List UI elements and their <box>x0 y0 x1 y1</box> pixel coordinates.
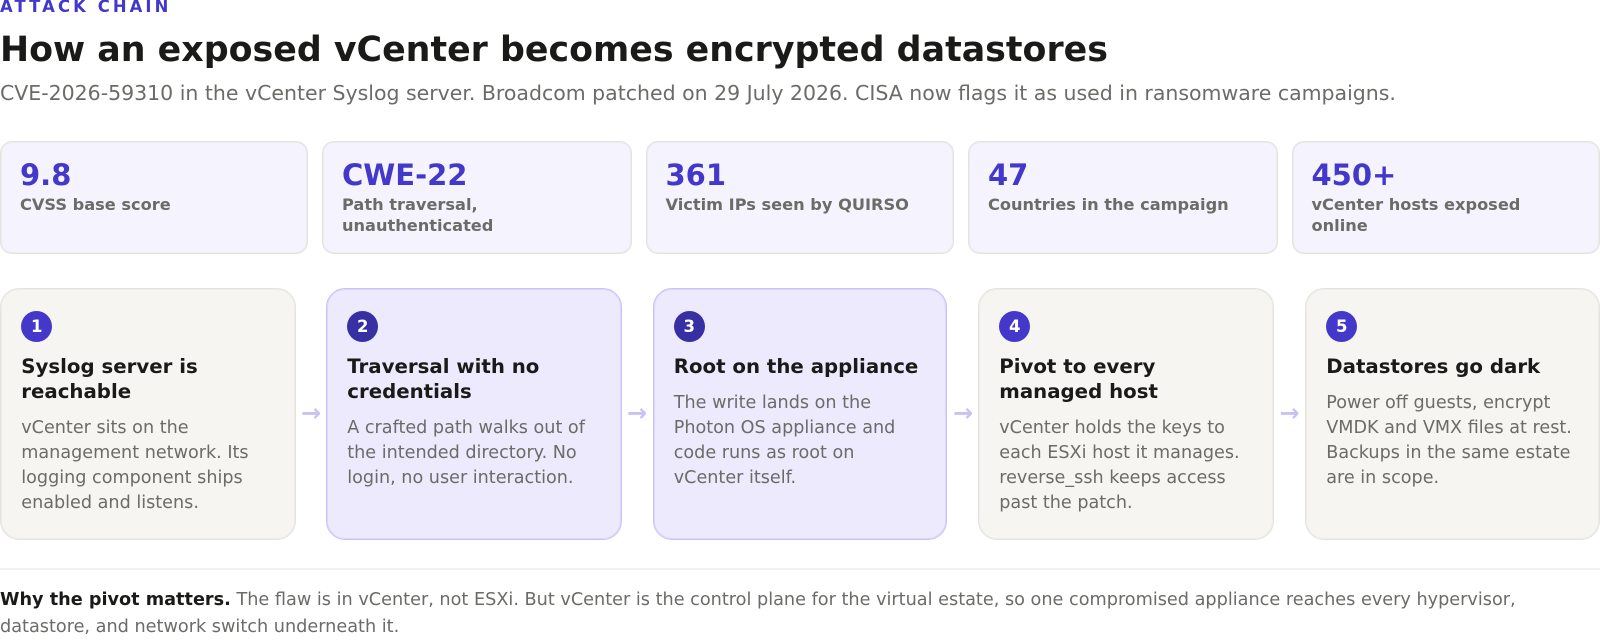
step 5 card: Backups in the same estate <box>1326 443 1570 463</box>
step 3 card: 3 <box>684 316 695 336</box>
step 4 card: 4 <box>1009 316 1020 336</box>
step 4 card <box>978 288 1274 540</box>
stat card: CVSS score: CVSS base score <box>20 195 171 214</box>
step 2 card: 2 <box>357 316 368 336</box>
step 2 card: credentials <box>347 380 472 402</box>
step 4 card: each ESXi host it manages. <box>999 443 1240 463</box>
step 2 card: the intended directory. No <box>347 443 577 463</box>
stat card: CVSS score: 9.8 <box>20 158 71 192</box>
step 1 card: vCenter sits on the <box>21 418 189 438</box>
step 5 card <box>1305 288 1600 540</box>
step 3 card: Root on the appliance <box>674 354 918 378</box>
stat card: exposed hosts: 450+ <box>1312 158 1396 192</box>
footer note <box>0 590 1516 636</box>
step 3 card: code runs as root on <box>674 443 854 463</box>
stat card: victim IPs: Victim IPs seen by QUIRSO <box>666 195 909 214</box>
step 5 card: are in scope. <box>1326 468 1439 488</box>
step 4 card: Pivot to every <box>999 354 1155 378</box>
step 3 card <box>652 288 947 540</box>
stat card: victim IPs: 361 <box>666 158 726 192</box>
stat card: CWE: CWE-22 <box>342 158 467 192</box>
stat card: CWE: Path traversal, <box>342 195 478 214</box>
arrow 1 to 2: → <box>301 399 321 427</box>
step 4 card: reverse_ssh keeps access <box>999 468 1226 488</box>
step 5 card: VMDK and VMX files at rest. <box>1326 418 1572 438</box>
stat card: CWE: unauthenticated <box>342 216 493 235</box>
arrow 2 to 3: → <box>627 399 647 427</box>
step 2 card: Traversal with no <box>347 354 539 378</box>
stat card: exposed hosts: online <box>1312 216 1368 235</box>
stat card: exposed hosts <box>1292 141 1600 254</box>
step 3 card: vCenter itself. <box>674 468 796 488</box>
step 1 card: enabled and listens. <box>21 493 199 513</box>
step 3 card: The write lands on the <box>674 393 871 413</box>
stat card: countries <box>968 141 1278 254</box>
stat card: countries: 47 <box>988 158 1028 192</box>
step 1 card: management network. Its <box>21 443 249 463</box>
stat card: CWE <box>322 141 632 254</box>
step 1 card: Syslog server is <box>21 354 198 378</box>
step 1 card <box>0 288 296 540</box>
step 2 card: A crafted path walks out of <box>347 418 585 438</box>
stat card: CVSS score <box>0 141 308 254</box>
arrow 3 to 4: → <box>953 399 973 427</box>
step 4 card: managed host <box>999 380 1158 402</box>
step 1 card: reachable <box>21 380 131 402</box>
step 4 card: vCenter holds the keys to <box>999 418 1225 438</box>
step 1 card: 1 <box>31 316 42 336</box>
stat card: victim IPs <box>646 141 954 254</box>
title: How an exposed vCenter becomes encrypted datastores <box>0 30 1108 70</box>
step 5 card: Power off guests, encrypt <box>1326 393 1550 413</box>
stat card: exposed hosts: vCenter hosts exposed <box>1312 195 1520 214</box>
step 5 card: 5 <box>1336 316 1347 336</box>
step 2 card <box>326 288 622 540</box>
subtitle: CVE-2026-59310 in the vCenter Syslog server. Broadcom patched on 29 July 2026. CISA now flags it as used in ransomware campaigns. <box>0 81 1396 105</box>
step 4 card: past the patch. <box>999 493 1133 513</box>
step 2 card: login, no user interaction. <box>347 468 574 488</box>
step 1 card: logging component ships <box>21 468 243 488</box>
footer note: datastore, and network switch underneath it. <box>0 616 399 636</box>
stat card: countries: Countries in the campaign <box>988 195 1229 214</box>
step 5 card: Datastores go dark <box>1326 354 1540 378</box>
step 3 card: Photon OS appliance and <box>674 418 895 438</box>
footer note: Why the pivot matters. The flaw is in vCenter, not ESXi. But vCenter is the control plane for the virtual estate, so one compromised appliance reaches every hypervisor, <box>0 590 1516 610</box>
arrow 4 to 5: → <box>1279 399 1300 427</box>
